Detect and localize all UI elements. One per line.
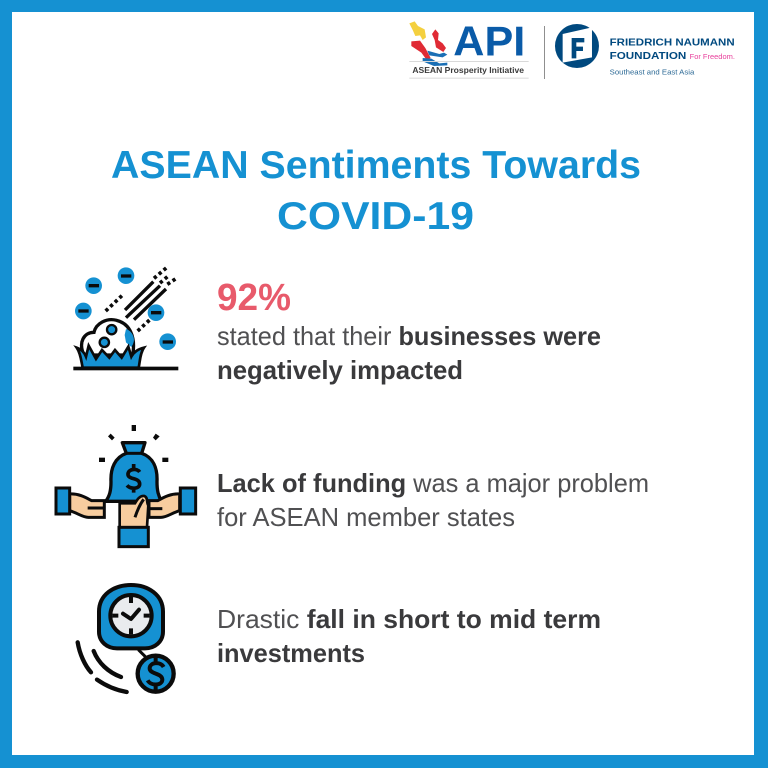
text: fall in investments: Drastic fall in short to mid term (217, 604, 601, 634)
icon: money bag and hands (56, 425, 196, 547)
icon: clock with falling investment (78, 585, 174, 692)
logo divider (544, 26, 545, 79)
logo: Friedrich Naumann Foundation: Southeast and East Asia (610, 69, 694, 76)
stat: 92% businesses negatively impacted (217, 277, 601, 385)
title: ASEAN Sentiments Towards (111, 144, 641, 187)
text: fall in investments (217, 604, 601, 668)
logo: Friedrich Naumann Foundation: FRIEDRICH NAUMANN (610, 38, 735, 49)
text: lack of funding (217, 468, 649, 532)
logo: Friedrich Naumann Foundation: FOUNDATION (610, 51, 686, 62)
text: lack of funding: for ASEAN member states (217, 502, 515, 532)
text: fall in investments: investments (217, 638, 365, 668)
icon: falling skull with negative signs (73, 267, 178, 370)
logo: Friedrich Naumann Foundation: For Freedom. (690, 54, 735, 61)
logo: ASEAN Prosperity Initiative: ASEAN Prosperity Initiative (412, 65, 524, 75)
stat: 92% businesses negatively impacted: stated that their businesses were (217, 321, 601, 351)
stat: 92% businesses negatively impacted: negatively impacted (217, 355, 463, 385)
logo: Friedrich Naumann Foundation (555, 24, 735, 76)
stat: 92% businesses negatively impacted: 92% (217, 277, 291, 319)
text: lack of funding: Lack of funding was a major problem (217, 468, 649, 498)
title (111, 144, 641, 238)
title: COVID-19 (277, 195, 474, 238)
logo: ASEAN Prosperity Initiative: API (453, 17, 525, 64)
logo: ASEAN Prosperity Initiative (409, 17, 529, 79)
